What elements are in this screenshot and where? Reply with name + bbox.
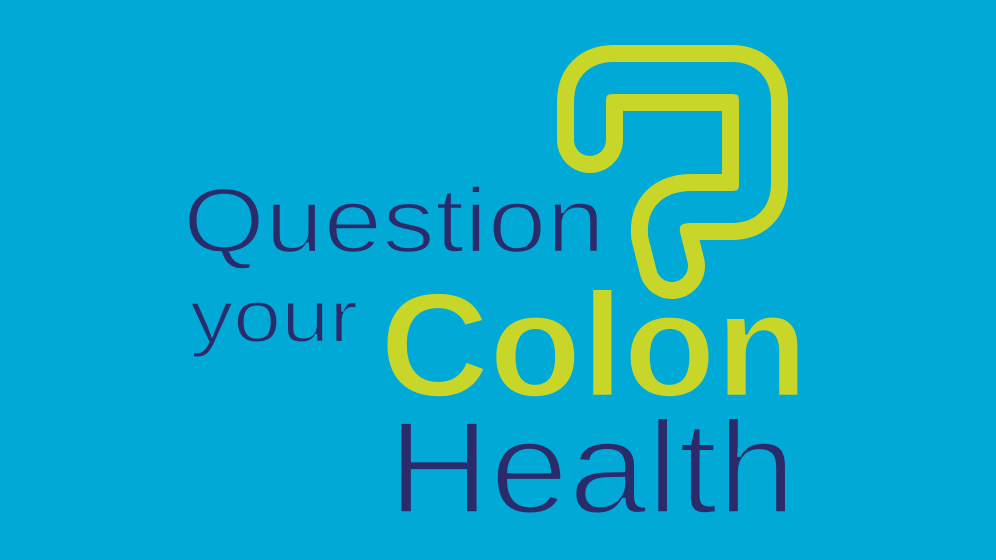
title: Question: Question xyxy=(183,170,605,272)
title: your: your xyxy=(190,275,358,358)
icon: colon outline xyxy=(590,78,755,266)
title: Colon: Colon xyxy=(380,263,808,428)
title: Health: Health xyxy=(388,394,796,541)
